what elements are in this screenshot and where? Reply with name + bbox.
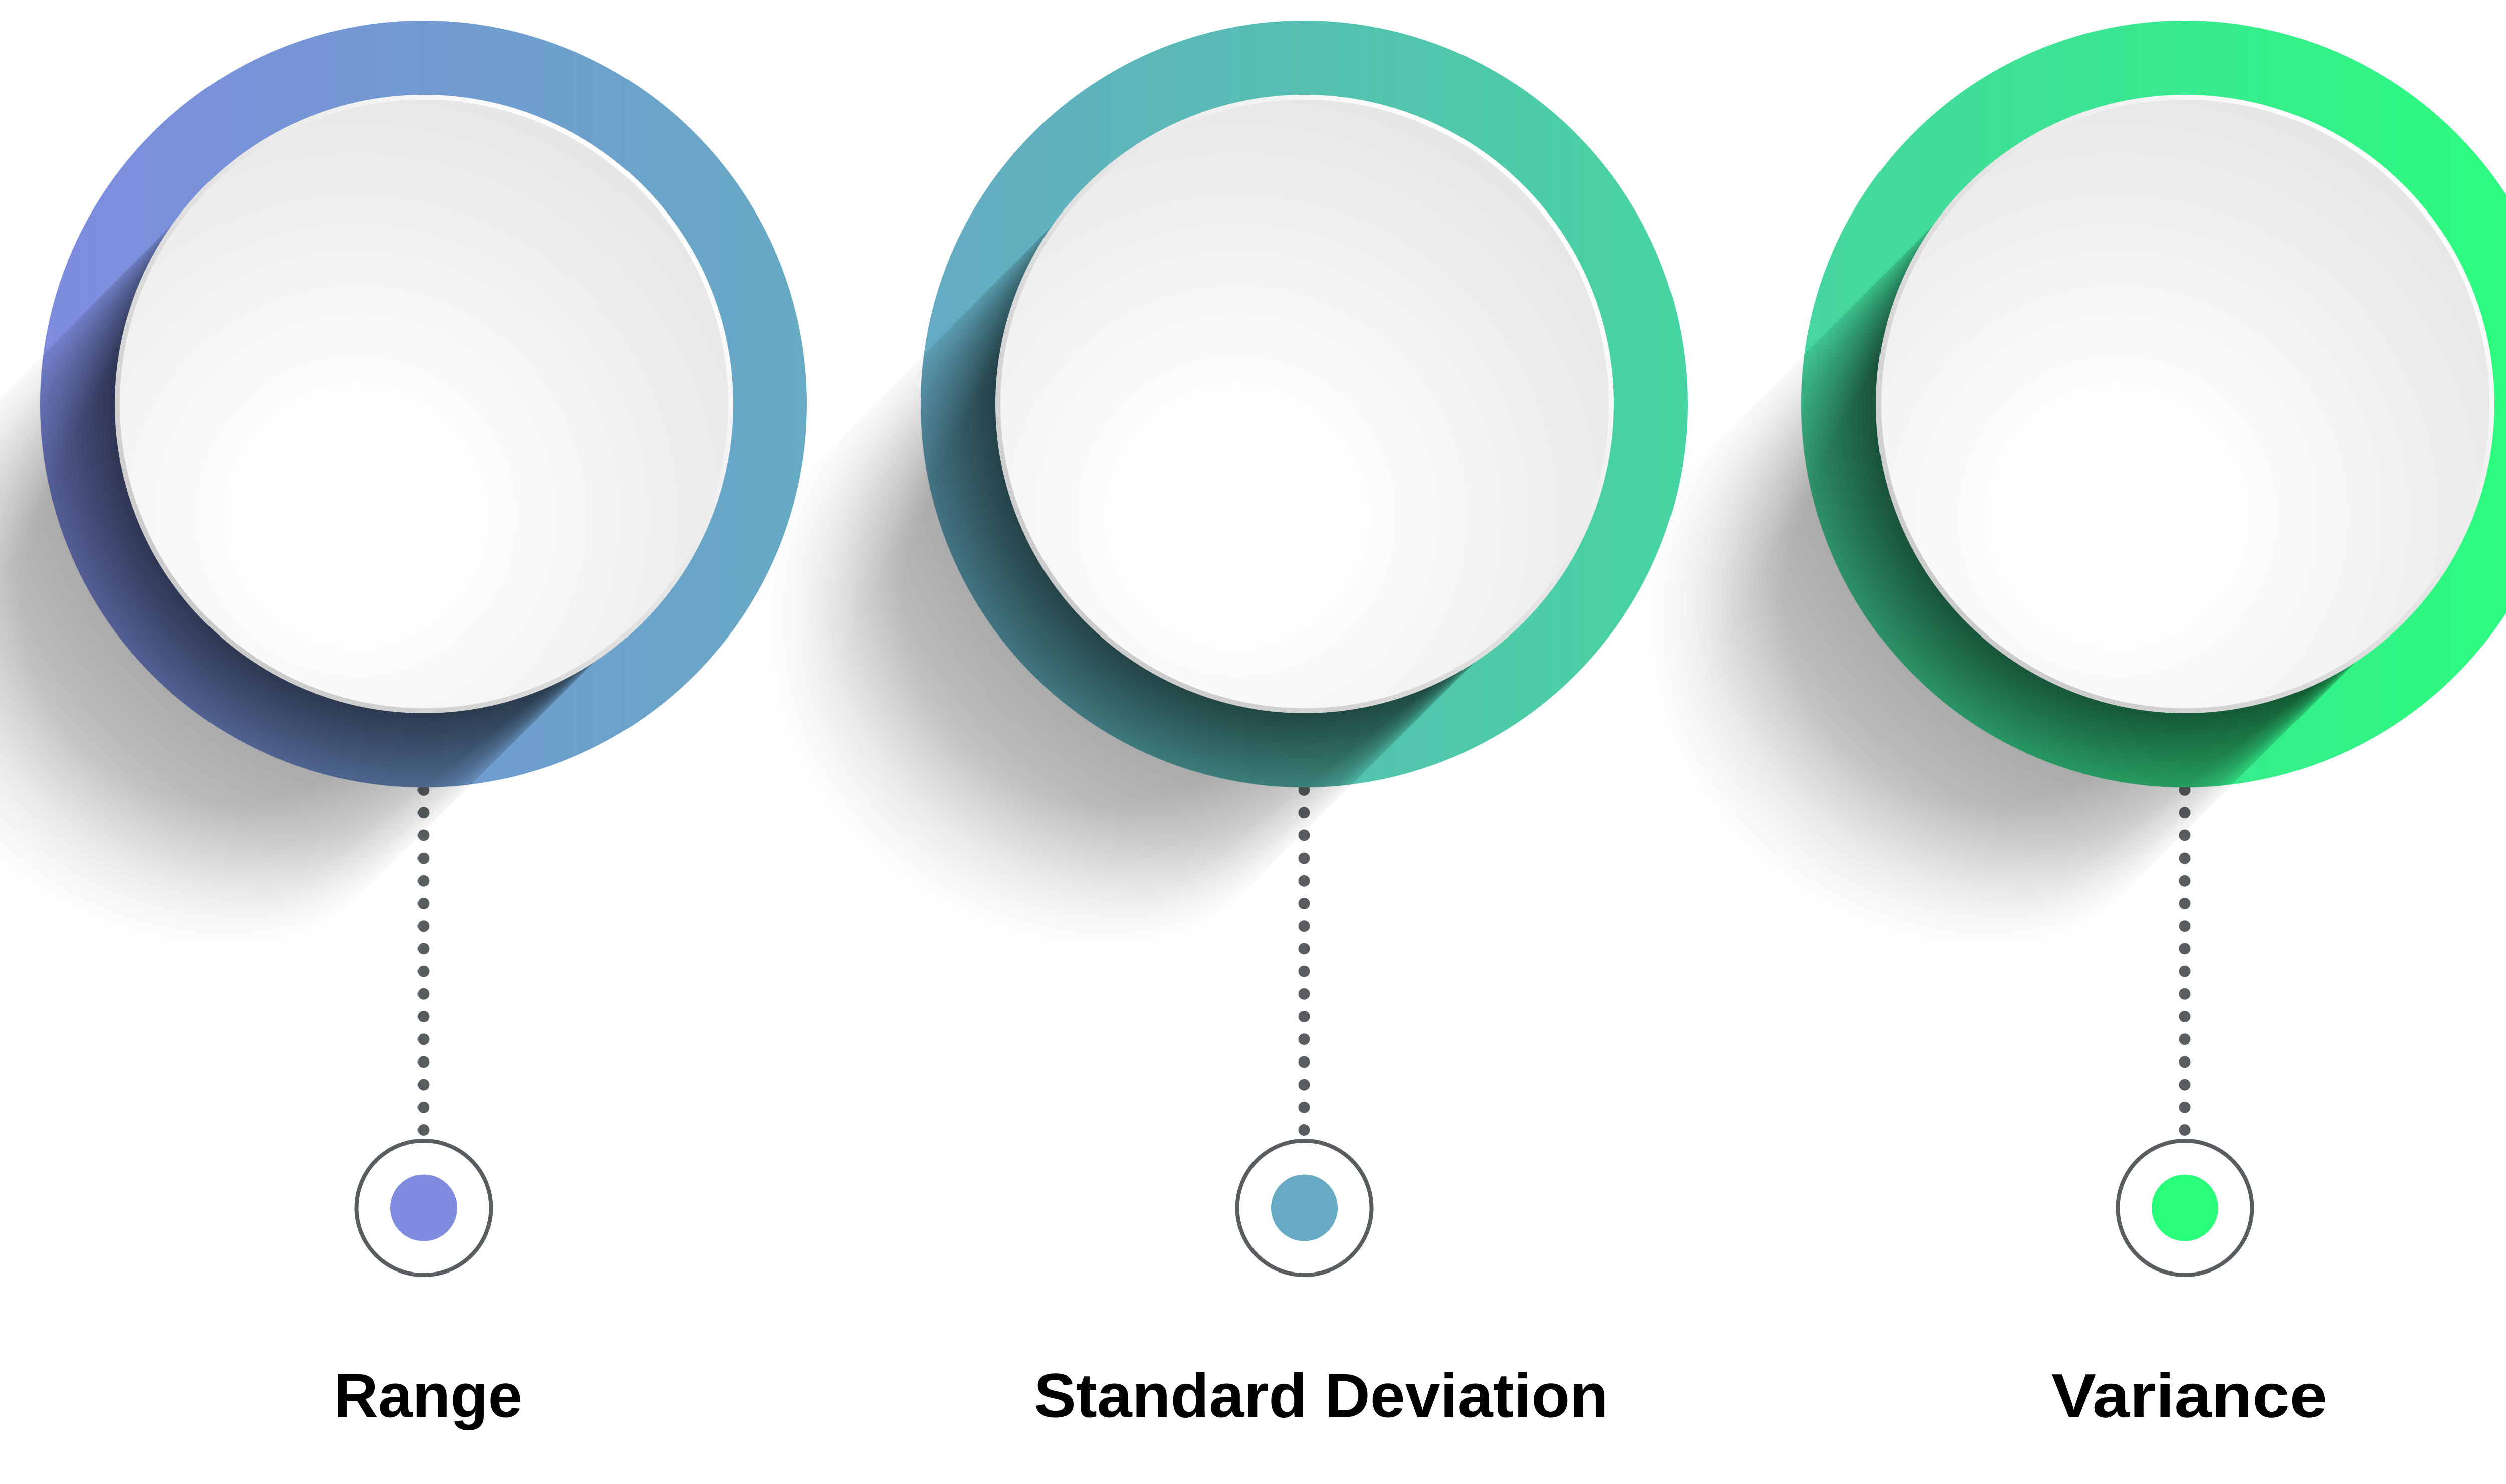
panel: Variance bbox=[1677, 21, 2506, 1430]
inner white disc bbox=[1876, 95, 2494, 713]
marker: ring with blue dot bbox=[355, 1139, 493, 1277]
long diagonal shadow bbox=[1677, 225, 2355, 921]
outer ring: blue gradient bbox=[40, 21, 807, 787]
dotted connector bbox=[1298, 787, 1310, 1136]
long diagonal shadow bbox=[796, 225, 1475, 921]
long diagonal shadow bbox=[0, 225, 594, 921]
panel: Range bbox=[0, 21, 807, 1430]
inner white disc bbox=[995, 95, 1614, 713]
label: Variance: Variance bbox=[2051, 1361, 2327, 1430]
inner white disc bbox=[115, 95, 733, 713]
label: Range: Range bbox=[334, 1361, 522, 1430]
marker: ring with teal dot bbox=[1235, 1139, 1373, 1277]
label: Standard Deviation: Standard Deviation bbox=[1034, 1361, 1608, 1430]
marker: ring with green dot bbox=[2115, 1138, 2255, 1279]
panel: Standard Deviation bbox=[796, 21, 1688, 1430]
outer ring: teal gradient bbox=[921, 21, 1688, 787]
dotted connector bbox=[418, 787, 429, 1136]
dotted connector bbox=[2175, 787, 2195, 1138]
outer ring: green gradient bbox=[1801, 21, 2506, 787]
